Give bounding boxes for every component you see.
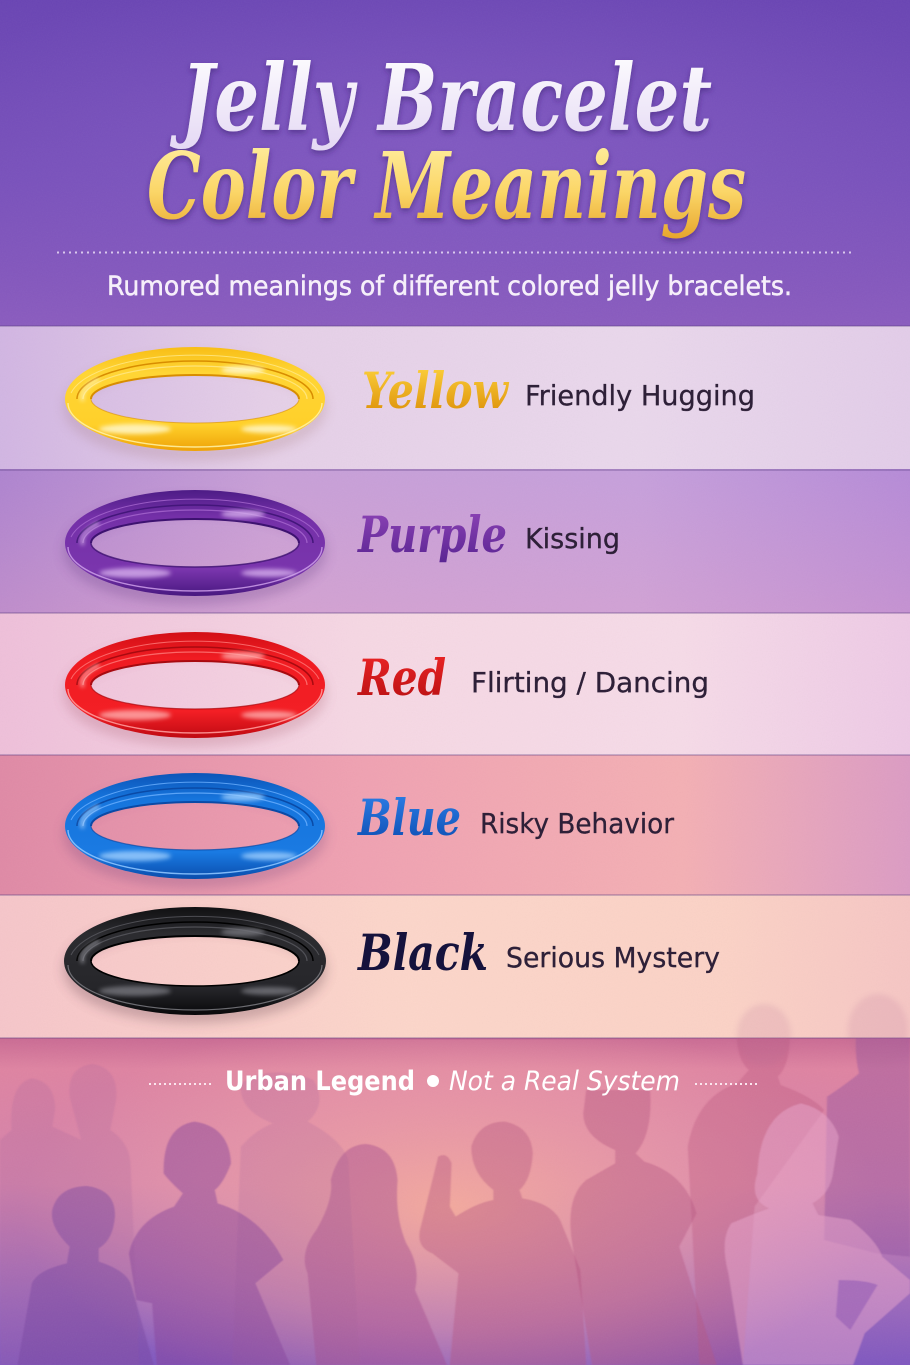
footer note (149, 1066, 759, 1097)
header background (0, 0, 910, 330)
label: yellow: Yellow (362, 361, 510, 420)
subtitle: Rumored meanings of different colored jelly bracelets. (107, 271, 792, 302)
title (147, 44, 746, 240)
bracelet: black (64, 907, 326, 1015)
bracelet: yellow (65, 347, 325, 453)
band: purple row background (0, 469, 910, 613)
bracelet: red (65, 632, 325, 739)
title line 1: Jelly Bracelet (170, 44, 712, 152)
faint heads over last band (737, 994, 908, 1066)
description: purple: Kissing (525, 522, 620, 555)
band: yellow row background (0, 326, 910, 469)
dotted divider (57, 252, 853, 254)
footer note: Urban Legend (225, 1066, 415, 1097)
description: blue: Risky Behavior (480, 807, 674, 840)
bracelet: purple (65, 490, 325, 597)
footer note: Not a Real System (449, 1066, 680, 1097)
description: yellow: Friendly Hugging (525, 379, 755, 412)
label: blue: Blue (356, 788, 461, 847)
label: purple: Purple (356, 505, 507, 564)
description: red: Flirting / Dancing (471, 666, 709, 699)
silhouettes: crowd of people (0, 1010, 910, 1365)
footer background (0, 1036, 910, 1365)
band: blue row background (0, 755, 910, 895)
label: red: Red (356, 648, 446, 707)
description: black: Serious Mystery (506, 941, 720, 974)
label: black: Black (356, 923, 488, 982)
band: red row background (0, 613, 910, 755)
bracelet: blue (65, 773, 325, 880)
band: black row background (0, 895, 910, 1038)
